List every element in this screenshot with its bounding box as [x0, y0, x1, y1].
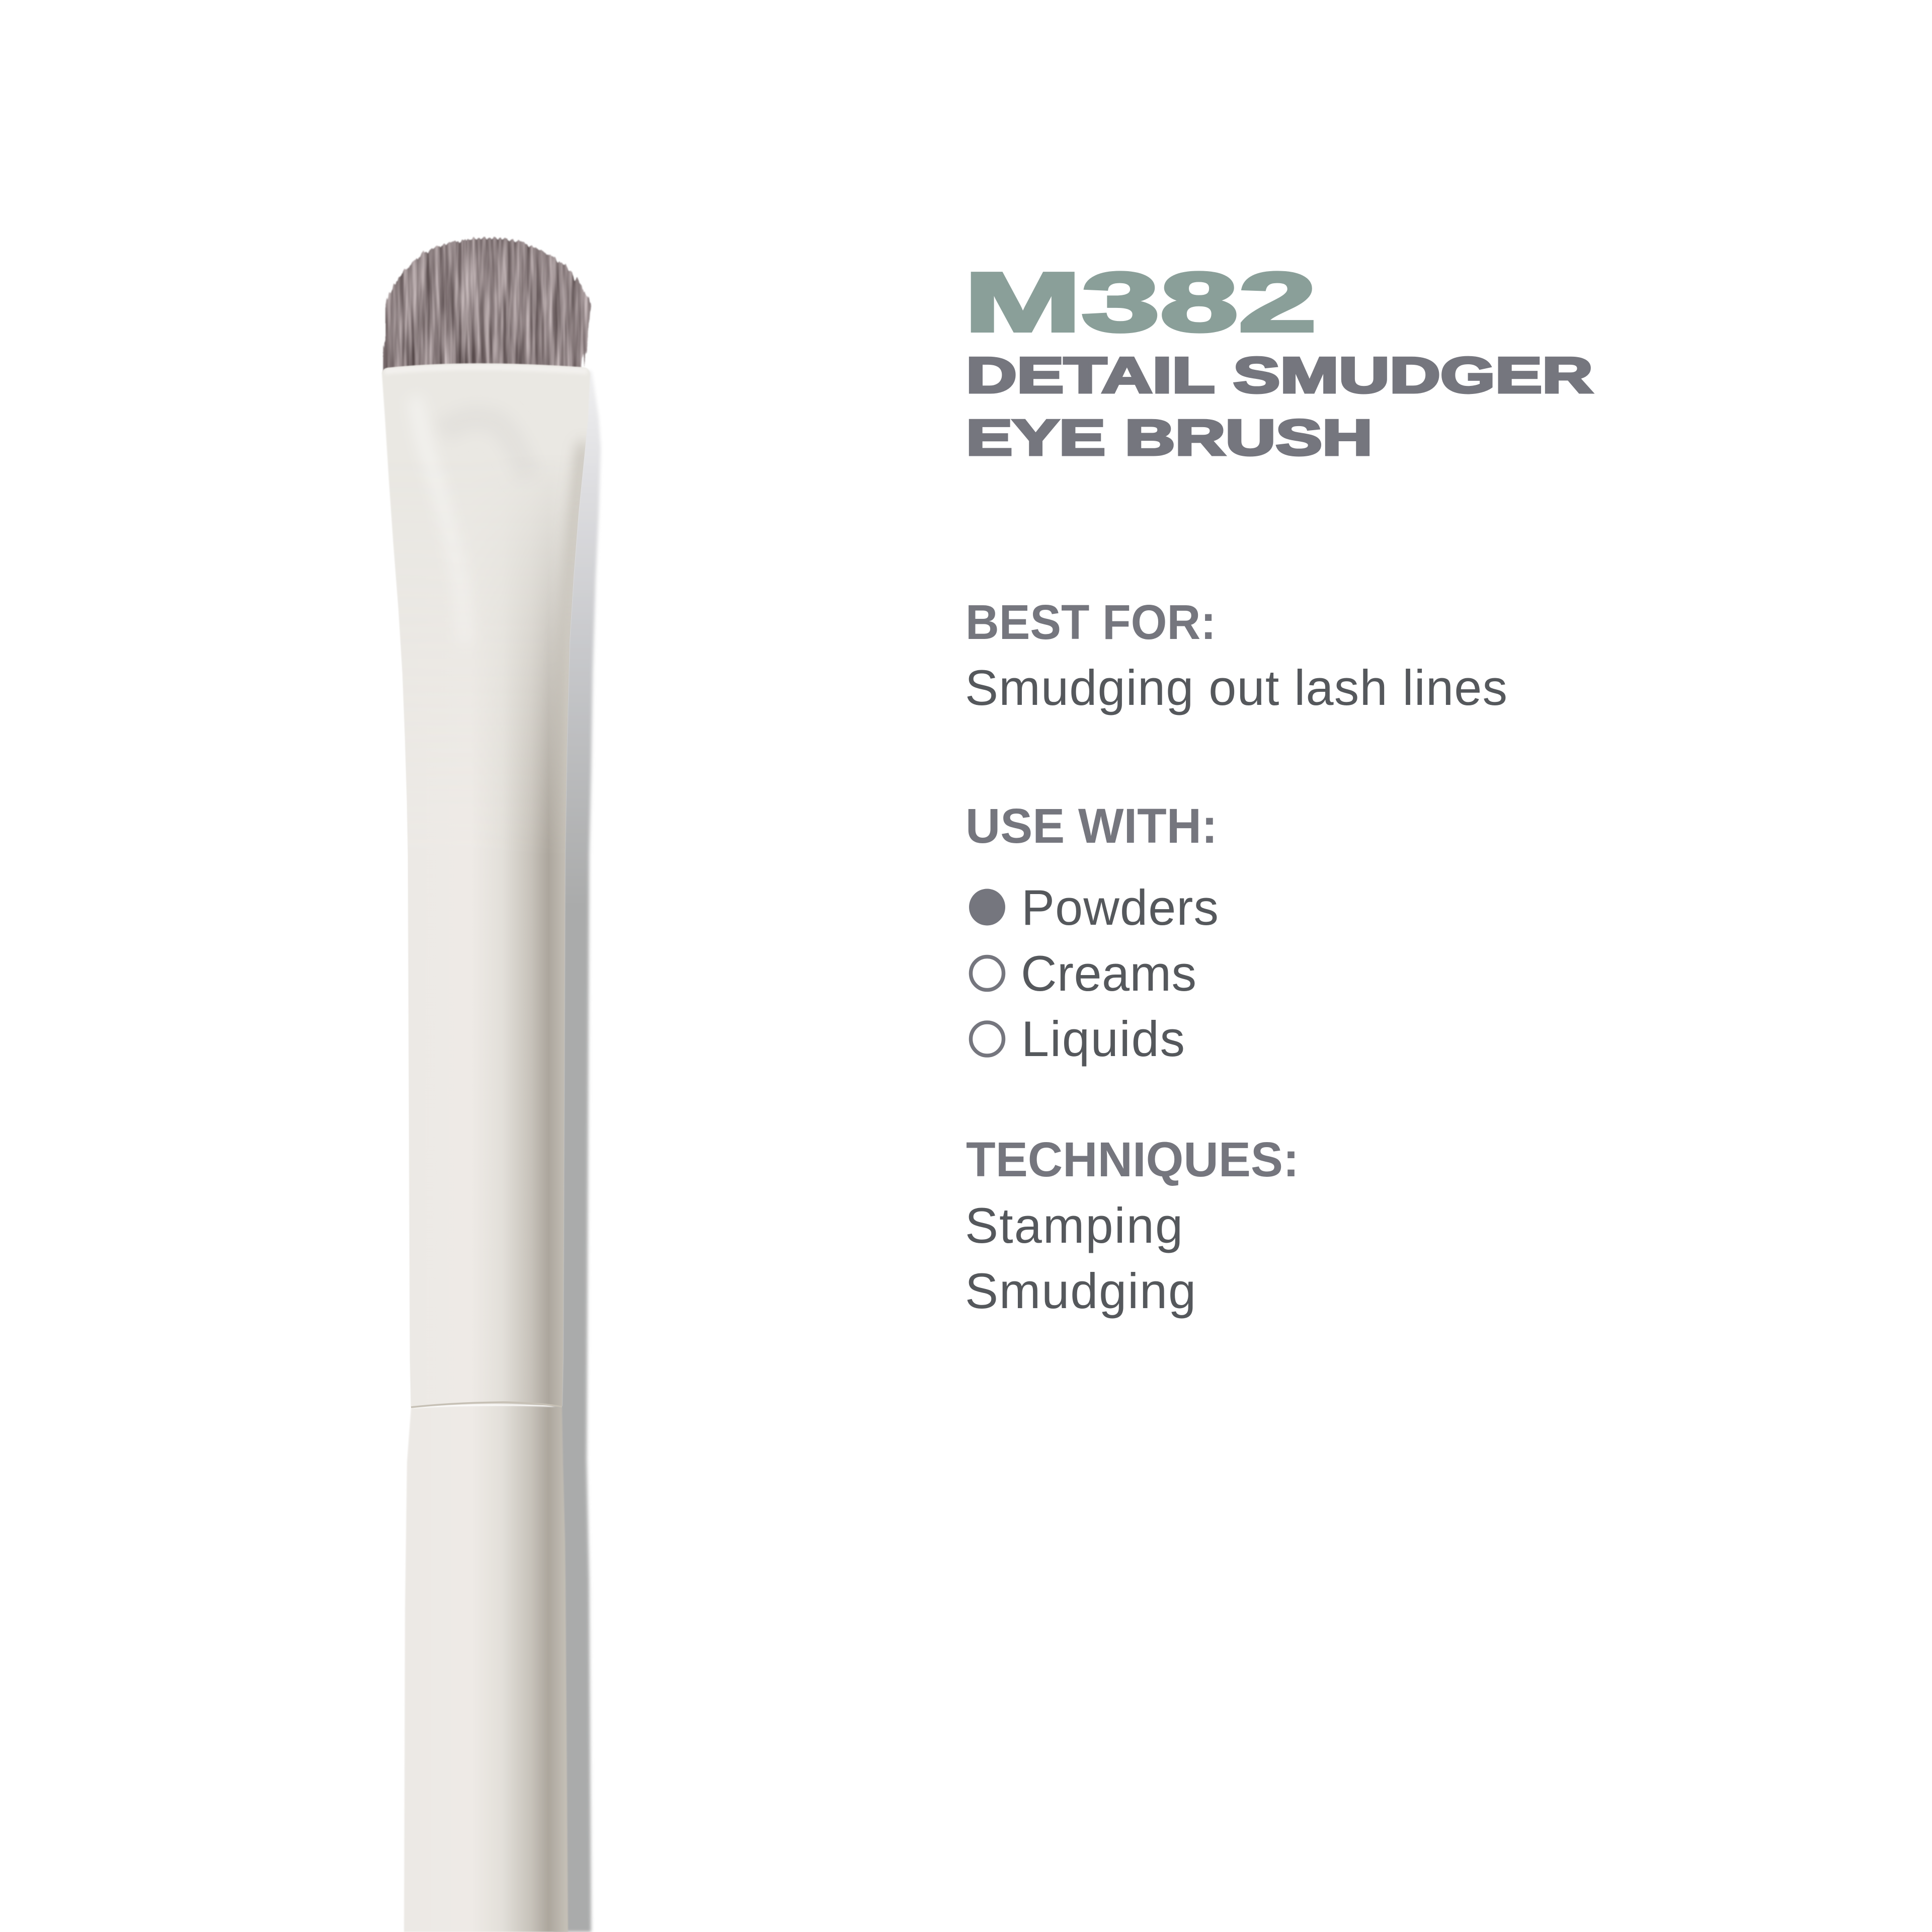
techniques section: Stamping [965, 1197, 1183, 1253]
use with list: Creams [1021, 945, 1196, 1001]
ferrule dent shading [443, 418, 528, 478]
best for section [965, 595, 1507, 715]
techniques section [965, 1132, 1299, 1319]
best for section: Smudging out lash lines [965, 660, 1507, 715]
use with list [969, 879, 1219, 1067]
product name: DETAIL SMUDGER [966, 347, 1593, 404]
brush illustration [377, 237, 601, 1932]
neck right-side shading [559, 443, 584, 855]
icon: empty bullet liquids [971, 1022, 1003, 1056]
techniques section: Smudging [965, 1263, 1196, 1319]
brush lower handle [404, 1406, 568, 1932]
product name: EYE BRUSH [966, 410, 1373, 466]
use with heading: USE WITH: [965, 798, 1218, 853]
brush bristles [385, 237, 590, 372]
product code M382: M382 [964, 256, 1317, 349]
product name [966, 347, 1593, 466]
best for section: BEST FOR: [965, 595, 1216, 650]
brush cast shadow [553, 370, 601, 1932]
icon: empty bullet creams [971, 957, 1003, 990]
icon: filled bullet [969, 889, 1005, 926]
use with list: Powders [1021, 879, 1219, 935]
handle shading [377, 362, 599, 1419]
use with list: Liquids [1021, 1011, 1185, 1067]
product text panel [964, 256, 1593, 1319]
brush ferrule and upper handle [377, 362, 599, 1419]
ferrule diagonal highlight [417, 412, 442, 497]
techniques section: TECHNIQUES: [966, 1132, 1299, 1187]
ferrule rim highlight [385, 367, 588, 371]
handle seam [411, 1402, 562, 1407]
